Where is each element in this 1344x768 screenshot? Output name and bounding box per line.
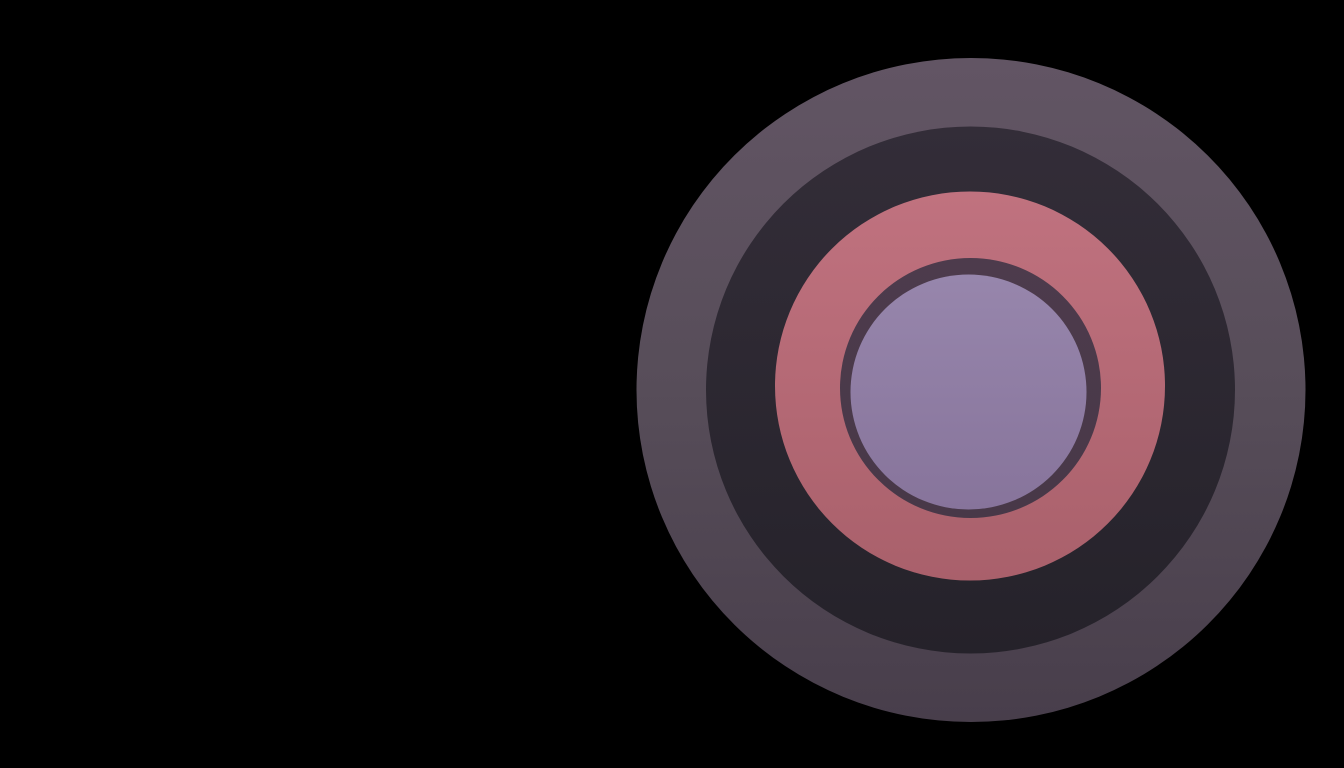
rose ring	[775, 192, 1165, 580]
dark ring	[706, 126, 1235, 654]
outer ring	[636, 58, 1306, 722]
lavender core	[850, 274, 1086, 510]
thin plum ring	[840, 258, 1101, 518]
